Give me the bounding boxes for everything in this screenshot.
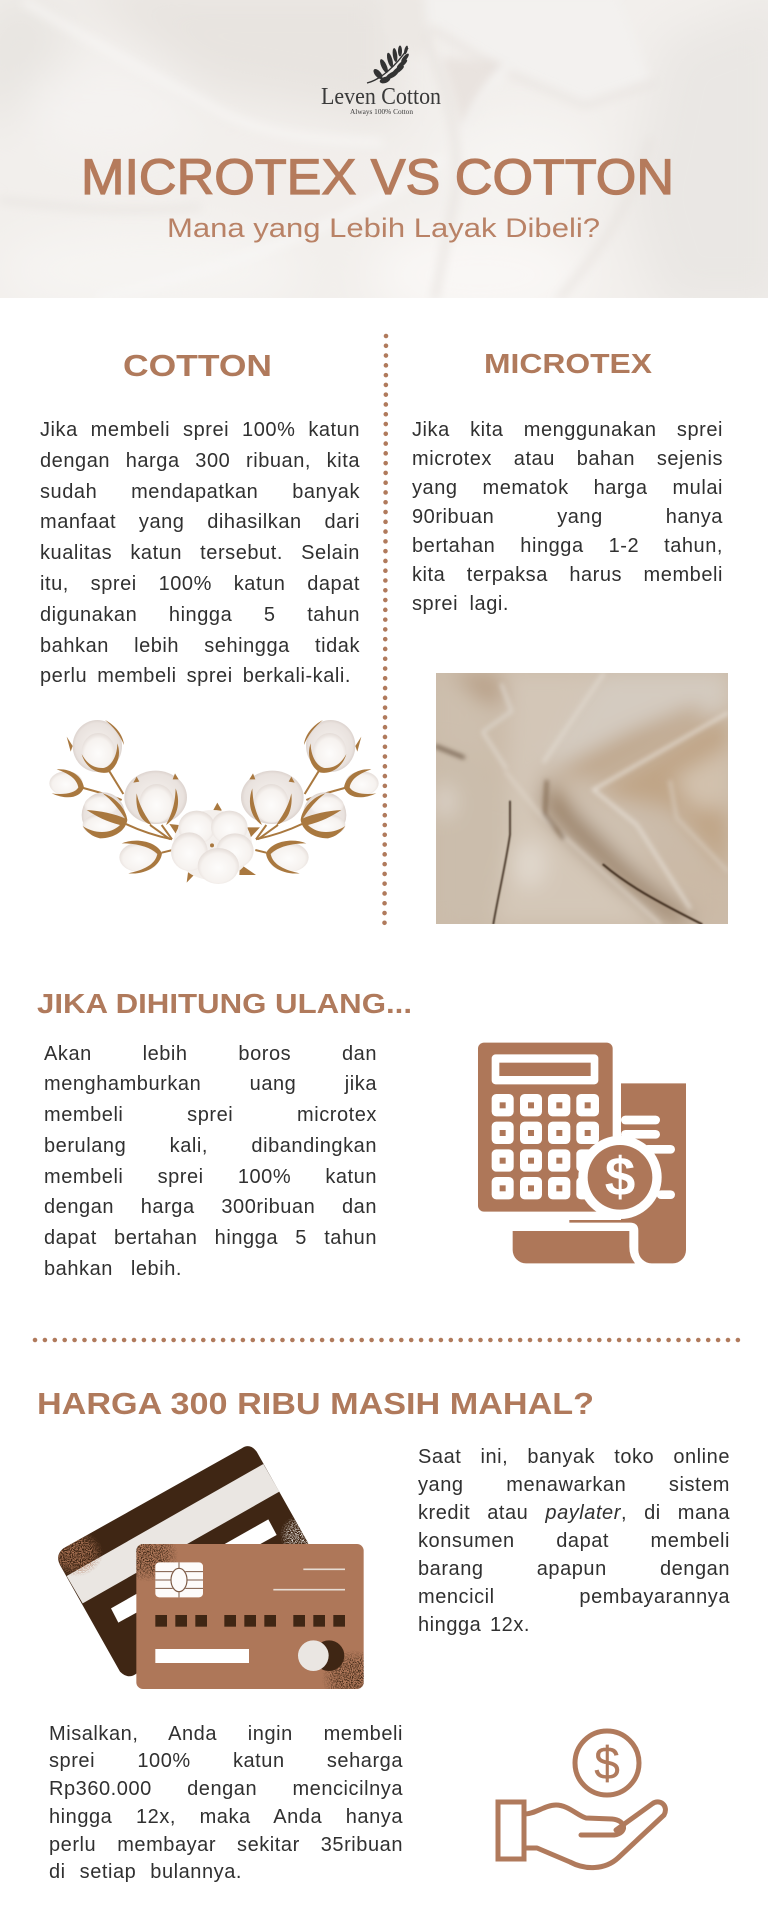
icon: calculator with bill and dollar coin: $ [605,1146,635,1208]
text: recalculation paragraph: bahkan lebih. [44,1258,182,1280]
text: paylater paragraph: barang apapun dengan [418,1558,730,1580]
left lower bud [82,792,127,838]
text: microtex paragraph: microtex atau bahan sejenis [412,448,723,470]
text: paylater paragraph: konsumen dapat membeli [418,1530,730,1552]
small left bud [49,769,84,797]
text: microtex paragraph: 90ribuan yang hanya [412,506,723,528]
text: installment example paragraph: perlu membayar sekitar 35ribuan [49,1834,403,1856]
logo tagline: Always 100% Cotton [350,108,414,116]
text: cotton paragraph: bahkan lebih sehingga tidak [40,635,360,657]
text: installment example paragraph: sprei 100% katun seharga [49,1750,403,1772]
icon: leaf branch [367,45,410,85]
front card [136,1544,364,1689]
top-left boll [67,720,124,773]
text: cotton paragraph: kualitas katun tersebut. Selain [40,542,360,564]
text: installment example paragraph: hingga 12x, maka Anda hanya [49,1806,403,1828]
text: recalculation paragraph: menghamburkan uang jika [44,1073,377,1095]
text: microtex paragraph: bertahan hingga 1-2 tahun, [412,535,723,557]
icon: credit cards [58,1446,364,1689]
card chip [155,1562,203,1597]
text: microtex paragraph: yang mematok harga mulai [412,477,723,499]
logo: Leven Cotton [321,45,441,116]
text: microtex paragraph: Jika kita menggunakan sprei [412,419,723,441]
text: cotton paragraph [40,419,360,687]
subtitle: Mana yang Lebih Layak Dibeli? [167,213,600,243]
title: MICROTEX VS COTTON [81,149,674,205]
text: microtex paragraph: kita terpaksa harus membeli [412,564,723,586]
text: microtex paragraph: sprei lagi. [412,593,509,615]
text: paylater paragraph: hingga 12x. [418,1614,530,1636]
illustration: cotton bolls bouquet [49,720,379,884]
text: installment example paragraph: di setiap bulannya. [49,1861,242,1883]
text: cotton paragraph: manfaat yang dihasilkan dari [40,511,360,533]
text: recalculation paragraph: membeli sprei 100% katun [44,1166,377,1188]
heading: jika dihitung ulang: JIKA DIHITUNG ULANG... [37,988,412,1019]
center cotton flower [169,803,260,884]
lower-left bud [119,841,162,874]
text: paylater paragraph: kredit atau paylater, di mana [418,1502,730,1524]
text: microtex paragraph [412,419,723,615]
heading: microtex: MICROTEX [484,348,652,379]
back card [47,1446,317,1676]
text: cotton paragraph: Jika membeli sprei 100% katun [40,419,360,441]
text: cotton paragraph: digunakan hingga 5 tahun [40,604,360,626]
text: recalculation paragraph [44,1042,377,1280]
icon: hand holding dollar coin: $ [594,1737,620,1789]
photo: microtex fabric [435,673,728,924]
text: recalculation paragraph: dengan harga 300ribuan dan [44,1196,377,1218]
text: installment example paragraph: Misalkan, Anda ingin membeli [49,1722,403,1744]
text: paylater paragraph: mencicil pembayarannya [418,1586,730,1608]
text: installment example paragraph [49,1722,403,1883]
text: recalculation paragraph: Akan lebih boros dan [44,1042,377,1064]
logo wordmark: Leven Cotton [321,84,441,110]
text: recalculation paragraph: dapat bertahan hingga 5 tahun [44,1227,377,1249]
text: cotton paragraph: perlu membeli sprei berkali-kali. [40,665,351,687]
text: installment example paragraph: Rp360.000 dengan mencicilnya [49,1778,403,1800]
text: cotton paragraph: sudah mendapatkan banyak [40,481,360,503]
header photo: white linen background [0,0,768,325]
icon: calculator with bill and dollar coin [478,1043,686,1263]
text: paylater paragraph: yang menawarkan sistem [418,1474,730,1496]
heading: cotton: COTTON [123,348,272,383]
mid-left boll [124,771,187,825]
text: paylater paragraph [418,1446,730,1636]
heading: harga 300 ribu masih mahal: HARGA 300 RIBU MASIH MAHAL? [37,1386,594,1421]
text: recalculation paragraph: membeli sprei microtex [44,1104,377,1126]
text: cotton paragraph: dengan harga 300 ribuan, kita [40,450,360,472]
text: recalculation paragraph: berulang kali, dibandingkan [44,1135,377,1157]
icon: hand holding dollar coin [498,1731,665,1868]
text: paylater paragraph: Saat ini, banyak toko online [418,1446,730,1468]
text: cotton paragraph: itu, sprei 100% katun dapat [40,573,360,595]
